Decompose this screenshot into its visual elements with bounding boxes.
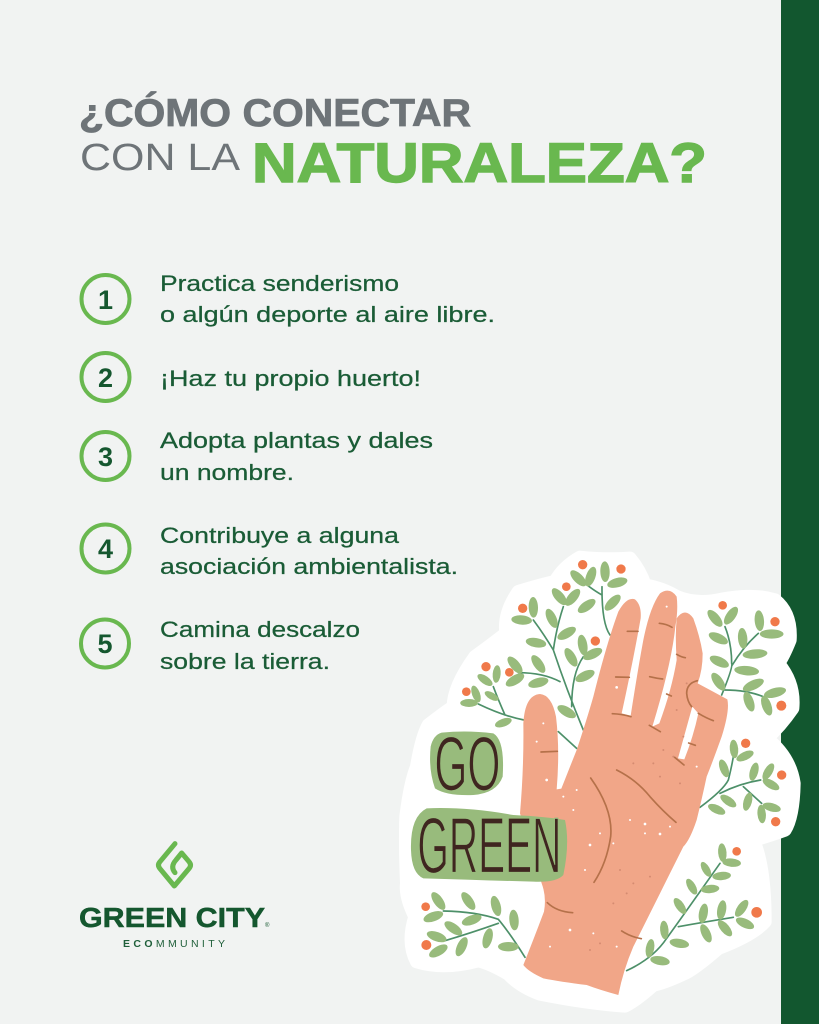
right middle branch bbox=[700, 739, 782, 824]
hand stipple shading bbox=[589, 682, 688, 951]
list item 1: 1 bbox=[98, 285, 113, 315]
icon: leaf mark bbox=[158, 844, 190, 886]
list item 3 bbox=[82, 428, 433, 485]
list item 3: 3 bbox=[98, 442, 113, 472]
list item 5: sobre la tierra. bbox=[160, 649, 330, 674]
title: ¿CÓMO CONECTAR bbox=[79, 91, 471, 135]
lower left branch bbox=[422, 890, 525, 960]
list item 5: 5 bbox=[97, 629, 113, 659]
list item 4 bbox=[82, 523, 458, 579]
right green bar bbox=[781, 0, 819, 1024]
left upper branch bbox=[460, 665, 577, 748]
wordmark: GREEN CITY bbox=[79, 902, 265, 933]
orange berries bbox=[421, 560, 786, 950]
GREEN bubble bbox=[411, 808, 567, 882]
list item 1 bbox=[82, 271, 495, 327]
list item 5 bbox=[81, 617, 360, 674]
list item 1: o algún deporte al aire libre. bbox=[160, 302, 495, 327]
GO label bbox=[430, 722, 503, 808]
list item 4: Contribuye a alguna bbox=[160, 523, 400, 548]
title: NATURALEZA? bbox=[252, 131, 707, 194]
hand bbox=[520, 591, 728, 995]
GREEN text: GREEN bbox=[417, 802, 561, 890]
title: CON LA bbox=[80, 137, 241, 179]
logo: Green City Ecommunity bbox=[79, 844, 270, 950]
central branch bbox=[504, 586, 604, 730]
list item 4: asociación ambientalista. bbox=[160, 554, 458, 579]
palm and finger creases bbox=[541, 623, 713, 939]
list item 2: 2 bbox=[98, 363, 113, 393]
hand speckles bbox=[536, 606, 698, 948]
tagline: ECO MMUNITY bbox=[123, 938, 225, 950]
lower right branch bbox=[627, 843, 756, 971]
GO bubble bbox=[430, 731, 503, 795]
GREEN label bbox=[411, 802, 567, 890]
GO text: GO bbox=[434, 722, 500, 808]
illustration: hand sticker bbox=[406, 557, 794, 1006]
list item 1: Practica senderismo bbox=[160, 271, 399, 296]
title bbox=[79, 91, 707, 194]
top branch bbox=[568, 561, 629, 635]
list item 4: 4 bbox=[98, 534, 113, 564]
right upper branch bbox=[705, 605, 787, 717]
list item 2: ¡Haz tu propio huerto! bbox=[160, 366, 421, 391]
thumb gap bbox=[678, 707, 698, 759]
list item 5: Camina descalzo bbox=[160, 617, 360, 642]
list item 3: un nombre. bbox=[160, 460, 294, 485]
registered mark: ® bbox=[265, 922, 270, 929]
list item 3: Adopta plantas y dales bbox=[160, 428, 433, 453]
sticker white backing bbox=[406, 557, 794, 1006]
list item 2 bbox=[82, 353, 421, 401]
